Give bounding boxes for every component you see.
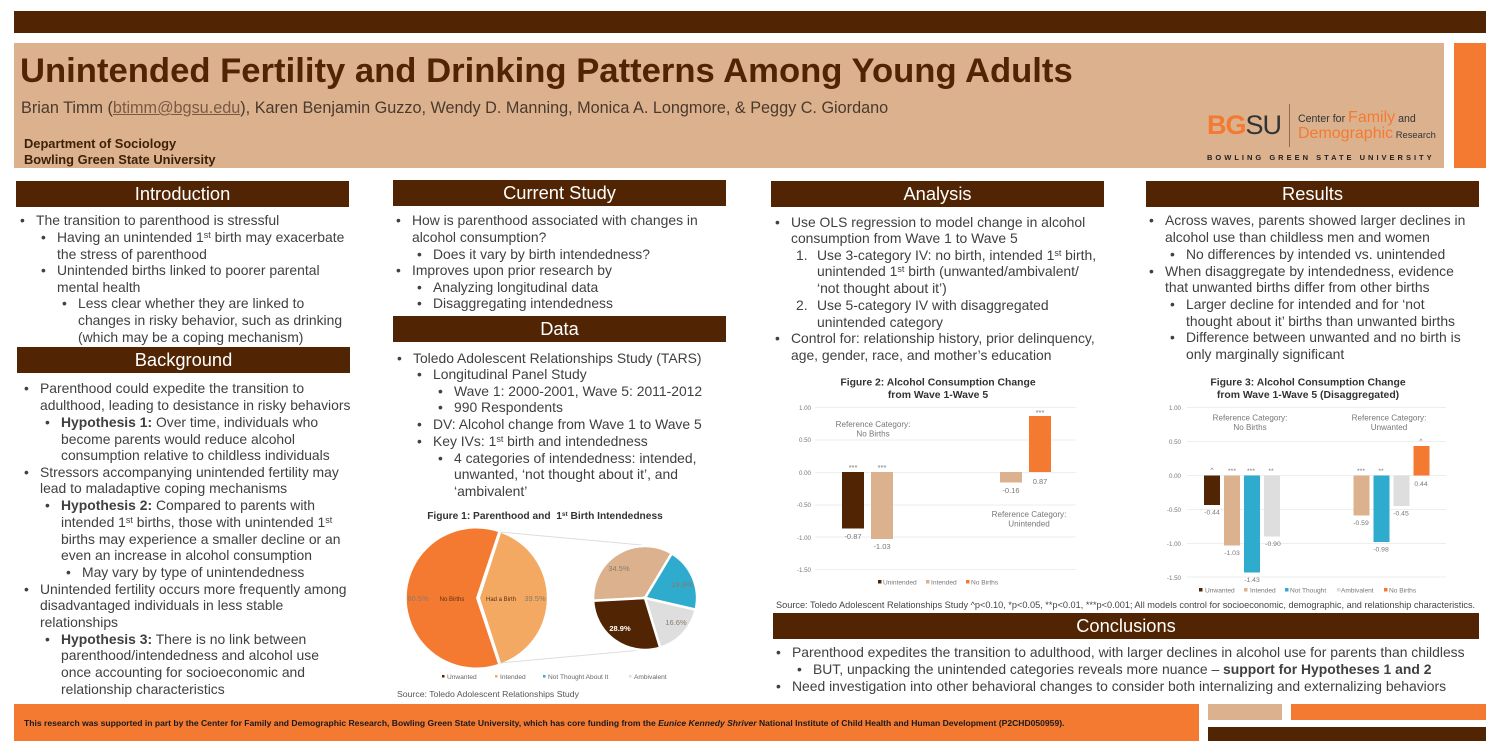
heading: current study: Current Study bbox=[503, 182, 616, 203]
chart: figure 2 alcohol consumption change: 0.00 bbox=[799, 470, 812, 477]
chart: figure 2 alcohol consumption change: Unintended bbox=[883, 580, 917, 586]
text: data bbox=[397, 350, 702, 499]
chart: figure 3 alcohol consumption change disaggregated: -0.45 bbox=[1393, 510, 1409, 518]
chart: figure 3 alcohol consumption change disaggregated: -0.50 bbox=[1167, 507, 1182, 514]
text: background: May vary by type of unintendedness bbox=[82, 564, 304, 580]
text: analysis bbox=[775, 214, 1096, 363]
text: current study: Analyzing longitudinal data bbox=[433, 279, 598, 295]
text: analysis: 1. bbox=[796, 247, 808, 263]
chart: figure 1 pie of pie bbox=[397, 511, 696, 699]
chart: figure 2 alcohol consumption change: No Births bbox=[856, 430, 890, 438]
heading: data bbox=[393, 316, 726, 342]
chart: figure 2 alcohol consumption change: Intended bbox=[931, 580, 957, 586]
text: data: • bbox=[438, 450, 443, 466]
text: results bbox=[1149, 212, 1465, 362]
chart: figure 2 alcohol consumption change: Reference Category: bbox=[836, 420, 910, 429]
text: analysis: • bbox=[775, 330, 780, 346]
text: analysis: Use 3-category IV: no birth, intended 1st birth, bbox=[817, 247, 1096, 263]
text: introduction: Unintended births linked to poorer parental bbox=[57, 262, 320, 278]
text: current study: Does it vary by birth intendedness? bbox=[433, 246, 650, 262]
text: introduction: (which may be a coping mechanism) bbox=[78, 329, 303, 345]
chart: figure 3 alcohol consumption change disaggregated: Ambivalent bbox=[1341, 588, 1374, 594]
chart: figure 3 alcohol consumption change disaggregated: Figure 3: Alcohol Consumption Change bbox=[1210, 378, 1406, 388]
chart: figure 3 alcohol consumption change disaggregated: -0.59 bbox=[1353, 520, 1369, 527]
chart: figure 2 alcohol consumption change: -1.00 bbox=[797, 535, 812, 542]
orange header block bbox=[1454, 43, 1486, 168]
text: background bbox=[24, 380, 350, 697]
chart: figure 3 alcohol consumption change disaggregated: No Births bbox=[1389, 588, 1417, 594]
chart: figure 3 alcohol consumption change disaggregated: -1.43 bbox=[1244, 577, 1260, 584]
chart: figure 3 alcohol consumption change disaggregated: No Births bbox=[1233, 423, 1267, 432]
text: current study: • bbox=[417, 279, 422, 295]
text: introduction: • bbox=[41, 262, 46, 278]
text: background: Parenthood could expedite the transition to bbox=[40, 380, 304, 396]
chart: figure 3 alcohol consumption change disaggregated: -0.98 bbox=[1373, 546, 1389, 554]
text: background: Hypothesis 3: There is no link between bbox=[61, 631, 306, 647]
chart: figure 3 alcohol consumption change disaggregated: ** bbox=[1268, 468, 1274, 475]
text: conclusions bbox=[776, 644, 1465, 694]
text: results: When disaggregate by intendedness, evidence bbox=[1165, 263, 1454, 279]
text: conclusions: • bbox=[776, 644, 781, 660]
text: background: Unintended fertility occurs more frequently among bbox=[40, 581, 347, 597]
text: analysis: unintended category bbox=[817, 314, 943, 330]
chart: figure 3 alcohol consumption change disaggregated: *** bbox=[1228, 468, 1236, 475]
chart: figure 2 alcohol consumption change: -0.87 bbox=[844, 532, 862, 541]
panel: introduction bbox=[16, 181, 349, 345]
chart: figure 3 alcohol consumption change disaggregated: ** bbox=[1378, 468, 1384, 475]
text: results: • bbox=[1170, 246, 1175, 262]
text: background: • bbox=[66, 564, 71, 580]
logo: BGSU center: Center for Family and bbox=[1298, 109, 1416, 126]
text: current study bbox=[396, 212, 698, 311]
chart: figure 1 pie of pie: 28.9% bbox=[609, 624, 631, 633]
text: background: intended 1st births, those with unintended 1st bbox=[61, 514, 332, 530]
chart: figure 2 alcohol consumption change: Unintended bbox=[1008, 520, 1050, 528]
top bar bbox=[14, 11, 1486, 33]
text: results: • bbox=[1170, 296, 1175, 312]
text: background: Hypothesis 1: Over time, individuals who bbox=[61, 414, 318, 430]
chart: figure 2 alcohol consumption change: *** bbox=[849, 463, 857, 472]
chart: figure 3 alcohol consumption change disaggregated: Reference Category: bbox=[1213, 414, 1287, 422]
text: data: ‘ambivalent’ bbox=[454, 483, 527, 499]
chart: figure 1 pie of pie: Birth Intendedness bbox=[568, 511, 663, 522]
text: background: Stressors accompanying unintended fertility may bbox=[40, 464, 339, 480]
text: background: relationships bbox=[40, 614, 118, 630]
text: background: even an increase in alcohol consumption bbox=[61, 547, 312, 563]
text: conclusions: BUT, unpacking the unintended categories reveals more nuance – support for Hypotheses 1 and 2 bbox=[813, 661, 1431, 677]
header banner bbox=[14, 43, 1444, 168]
chart: figure 2 alcohol consumption change: -0.16 bbox=[1002, 486, 1020, 495]
text: data: Wave 1: 2000-2001, Wave 5: 2011-2012 bbox=[454, 383, 702, 399]
text: introduction: • bbox=[41, 229, 46, 245]
chart: figure 1 pie of pie: 19.9% bbox=[671, 580, 693, 589]
chart: figure 2 alcohol consumption change: -1.03 bbox=[873, 542, 891, 551]
chart: figure 2 alcohol consumption change: from Wave 1-Wave 5 bbox=[888, 390, 988, 401]
text: introduction: • bbox=[20, 212, 25, 228]
chart: figure 2 alcohol consumption change: Reference Category: bbox=[992, 510, 1066, 519]
text: background: once accounting for socioeconomic and bbox=[61, 664, 305, 680]
chart: figure 1 pie of pie: Ambivalent bbox=[634, 674, 667, 681]
text: introduction: • bbox=[62, 295, 67, 311]
text: conclusions: • bbox=[797, 661, 802, 677]
chart: figure 2 alcohol consumption change: *** bbox=[878, 463, 886, 472]
text: results: No differences by intended vs. unintended bbox=[1186, 246, 1445, 262]
text: background: lead to maladaptive coping mechanisms bbox=[40, 480, 287, 496]
chart: figure 3 alcohol consumption change disaggregated: *** bbox=[1247, 468, 1255, 475]
text: current study: • bbox=[396, 262, 401, 278]
chart: figure 2 alcohol consumption change: -0.50 bbox=[797, 502, 812, 509]
chart: figure 3 alcohol consumption change disaggregated: ^ bbox=[1210, 467, 1214, 474]
text: introduction: Less clear whether they are linked to bbox=[78, 295, 304, 311]
chart: figure 3 alcohol consumption change disaggregated: -1.50 bbox=[1167, 575, 1182, 582]
footer accent: brown bbox=[1208, 727, 1486, 741]
text: data: 990 Respondents bbox=[454, 399, 563, 415]
chart: figure 3 alcohol consumption change disaggregated: -0.90 bbox=[1265, 541, 1281, 548]
chart: figure 2 alcohol consumption change: No Births bbox=[971, 580, 999, 586]
text: data: • bbox=[417, 416, 422, 432]
logo: BGSU center: Demographic Research bbox=[1298, 125, 1436, 142]
text: analysis: consumption from Wave 1 to Wave 5 bbox=[791, 230, 1018, 246]
text: conclusions: Parenthood expedites the transition to adulthood, with larger declines in alcohol use for parents than childless bbox=[792, 644, 1465, 660]
text: background: parenthood/intendedness and alcohol use bbox=[61, 647, 319, 663]
chart: figure 1 pie of pie: 60.5% bbox=[407, 594, 429, 603]
chart: figure 1 pie of pie: st bbox=[562, 511, 569, 518]
chart: figure 3 alcohol consumption change disaggregated: 0.44 bbox=[1414, 481, 1428, 488]
text: results: • bbox=[1170, 329, 1175, 345]
heading: background bbox=[17, 347, 350, 373]
text: results: • bbox=[1149, 212, 1154, 228]
chart: figure 1 pie of pie: Not Thought About It bbox=[548, 674, 609, 681]
text: data: • bbox=[397, 350, 402, 366]
text: results: Across waves, parents showed larger declines in bbox=[1165, 212, 1465, 228]
text: data: • bbox=[417, 433, 422, 449]
text: results: Difference between unwanted and no birth is bbox=[1186, 329, 1461, 345]
text: introduction: mental health bbox=[57, 279, 140, 295]
text: background: births may experience a smaller decline or an bbox=[61, 531, 340, 547]
text: introduction: The transition to parenthood is stressful bbox=[36, 212, 279, 228]
chart: figure 3 alcohol consumption change disaggregated bbox=[1167, 378, 1446, 594]
panel: results bbox=[1146, 181, 1479, 362]
chart: figure 3 alcohol consumption change disaggregated: from Wave 1-Wave 5 (Disaggregated) bbox=[1217, 390, 1399, 401]
panel: conclusions bbox=[773, 613, 1479, 694]
text: results: that unwanted births differ from other births bbox=[1165, 279, 1430, 295]
text: data: unwanted, ‘not thought about it’, and bbox=[454, 466, 678, 482]
panel: data bbox=[393, 316, 726, 499]
text: data: Longitudinal Panel Study bbox=[433, 366, 587, 382]
source note: Source: Toledo Adolescent Relationships Study ^p<0.10, *p<0.05, **p<0.01, ***p<0.001; All models control for socioeconomic, demographic, and relationship characteristics. bbox=[776, 600, 1475, 610]
chart: figure 3 alcohol consumption change disaggregated: -1.00 bbox=[1167, 541, 1182, 548]
heading: conclusions: Conclusions bbox=[1076, 615, 1176, 636]
text: introduction: Having an unintended 1st birth may exacerbate bbox=[57, 229, 344, 245]
text: data: • bbox=[438, 383, 443, 399]
text: conclusions: Need investigation into other behavioral changes to consider both internalizing and externalizing behaviors bbox=[792, 678, 1446, 694]
text: current study: • bbox=[396, 212, 401, 228]
heading: analysis: Analysis bbox=[903, 183, 972, 204]
department bbox=[24, 136, 216, 166]
chart: figure 3 alcohol consumption change disaggregated: 0.00 bbox=[1169, 473, 1182, 480]
department: Department of Sociology bbox=[24, 136, 176, 151]
text: background: • bbox=[24, 380, 29, 396]
footer: funding note bbox=[14, 704, 1199, 741]
chart: figure 2 alcohol consumption change: Figure 2: Alcohol Consumption Change bbox=[840, 378, 1036, 388]
logo: BGSU center bbox=[1207, 104, 1436, 162]
text: current study: Improves upon prior research by bbox=[412, 262, 612, 278]
funding text: This research was supported in part by the Center for Family and Demographic Research, Bowling Green State University, which has core funding from the Eunice Kennedy Shriver National Institute of Child Health and Human Development (P2CHD050959). bbox=[24, 718, 1064, 728]
text: analysis: 2. bbox=[796, 297, 808, 313]
text: background: • bbox=[45, 414, 50, 430]
text: current study: • bbox=[417, 295, 422, 311]
chart: figure 2 alcohol consumption change: 0.87 bbox=[1033, 477, 1047, 486]
heading: introduction bbox=[16, 181, 349, 207]
chart: figure 3 alcohol consumption change disaggregated: -0.44 bbox=[1204, 510, 1220, 516]
text: analysis: ‘not thought about it’) bbox=[817, 280, 947, 296]
text: analysis: Control for: relationship history, prior delinquency, bbox=[791, 330, 1095, 346]
text: analysis: unintended 1st birth (unwanted/ambivalent/ bbox=[817, 263, 1079, 279]
text: analysis: • bbox=[775, 214, 780, 230]
chart: figure 3 alcohol consumption change disaggregated: Reference Category: bbox=[1352, 414, 1426, 422]
title: Unintended Fertility and Drinking Patterns Among Young Adults bbox=[20, 52, 1073, 90]
text: data: Toledo Adolescent Relationships Study (TARS) bbox=[413, 350, 702, 366]
chart: figure 3 alcohol consumption change disaggregated: Unwanted bbox=[1205, 588, 1235, 594]
heading: background: Background bbox=[135, 349, 232, 370]
chart: figure 3 alcohol consumption change disaggregated: 0.50 bbox=[1169, 439, 1182, 446]
panel: analysis bbox=[771, 181, 1104, 363]
chart: figure 1 pie of pie: 16.6% bbox=[665, 618, 687, 627]
chart: figure 1 pie of pie: Unwanted bbox=[447, 674, 477, 681]
text: background: • bbox=[24, 464, 29, 480]
panel: current study bbox=[393, 180, 726, 311]
chart: figure 2 alcohol consumption change: 1.00 bbox=[799, 405, 812, 412]
chart: figure 1 pie of pie: Intended bbox=[500, 674, 526, 681]
text: background: Hypothesis 2: Compared to parents with bbox=[61, 497, 315, 513]
text: introduction bbox=[20, 212, 344, 345]
heading: current study bbox=[393, 180, 726, 206]
text: background: consumption relative to childless individuals bbox=[61, 447, 330, 463]
text: current study: alcohol consumption? bbox=[412, 229, 546, 245]
heading: results: Results bbox=[1282, 183, 1343, 204]
heading: introduction: Introduction bbox=[135, 183, 230, 204]
text: data: DV: Alcohol change from Wave 1 to Wave 5 bbox=[433, 416, 702, 432]
text: results: Larger decline for intended and for ‘not bbox=[1186, 296, 1425, 312]
text: current study: Disaggregating intendedness bbox=[433, 295, 613, 311]
heading: analysis bbox=[771, 181, 1104, 207]
text: results: only marginally significant bbox=[1186, 346, 1344, 362]
text: background: • bbox=[24, 581, 29, 597]
authors: Brian Timm (btimm@bgsu.edu), Karen Benjamin Guzzo, Wendy D. Manning, Monica A. Longmore, & Peggy C. Giordano bbox=[21, 99, 888, 117]
text: results: • bbox=[1149, 263, 1154, 279]
chart: figure 2 alcohol consumption change: 0.50 bbox=[799, 437, 812, 444]
text: analysis: Use 5-category IV with disaggregated bbox=[817, 297, 1049, 313]
chart: figure 3 alcohol consumption change disaggregated: Not Thought bbox=[1290, 588, 1326, 594]
chart: figure 3 alcohol consumption change disaggregated: Intended bbox=[1250, 588, 1276, 594]
text: results: thought about it’ births than unwanted births bbox=[1186, 313, 1455, 329]
text: introduction: the stress of parenthood bbox=[57, 246, 207, 262]
text: introduction: changes in risky behavior, such as drinking bbox=[78, 312, 342, 328]
footer accent: tan bbox=[1208, 704, 1282, 720]
chart: figure 1 pie of pie: Source: Toledo Adolescent Relationships Study bbox=[397, 689, 580, 699]
heading: results bbox=[1146, 181, 1479, 207]
panel: background bbox=[17, 347, 350, 697]
chart: figure 3 alcohol consumption change disaggregated: -1.03 bbox=[1224, 550, 1240, 557]
chart: figure 3 alcohol consumption change disaggregated: *** bbox=[1357, 468, 1365, 475]
text: conclusions: • bbox=[776, 678, 781, 694]
text: background: disadvantaged individuals in less stable bbox=[40, 597, 283, 613]
logo: BGSU center: BOWLING GREEN STATE UNIVERSITY bbox=[1207, 153, 1435, 162]
text: analysis: age, gender, race, and mother’s education bbox=[791, 347, 1052, 363]
text: data: • bbox=[417, 366, 422, 382]
chart: figure 1 pie of pie: Had a Birth bbox=[486, 597, 516, 603]
text: background: • bbox=[45, 631, 50, 647]
chart: figure 3 alcohol consumption change disaggregated: ^ bbox=[1419, 438, 1423, 445]
text: current study: How is parenthood associated with changes in bbox=[412, 212, 698, 228]
chart: figure 2 alcohol consumption change: -1.50 bbox=[797, 567, 812, 574]
chart: figure 2 alcohol consumption change bbox=[797, 378, 1076, 586]
text: background: relationship characteristics bbox=[61, 681, 225, 697]
text: current study: • bbox=[417, 246, 422, 262]
chart: figure 3 alcohol consumption change disaggregated: 1.00 bbox=[1169, 405, 1182, 412]
chart: figure 2 alcohol consumption change: *** bbox=[1036, 408, 1044, 417]
chart: figure 1 pie of pie: 34.5% bbox=[608, 564, 630, 573]
text: data: • bbox=[438, 399, 443, 415]
text: data: Key IVs: 1st birth and intendedness bbox=[433, 433, 648, 449]
text: results: alcohol use than childless men and women bbox=[1165, 229, 1430, 245]
text: background: become parents would reduce alcohol bbox=[61, 431, 295, 447]
department: Bowling Green State University bbox=[24, 152, 216, 166]
text: background: adulthood, leading to desistance in risky behaviors bbox=[40, 397, 350, 413]
chart: figure 1 pie of pie: Figure 1: Parenthood and 1 bbox=[427, 511, 562, 522]
text: data: 4 categories of intendedness: intended, bbox=[454, 450, 696, 466]
text: analysis: Use OLS regression to model change in alcohol bbox=[791, 214, 1085, 230]
heading: conclusions bbox=[773, 613, 1479, 639]
heading: data: Data bbox=[540, 318, 579, 339]
chart: figure 1 pie of pie: 39.5% bbox=[524, 594, 546, 603]
footer accent: orange bbox=[1291, 704, 1486, 720]
text: background: • bbox=[45, 497, 50, 513]
chart: figure 3 alcohol consumption change disaggregated: Unwanted bbox=[1371, 423, 1407, 432]
logo: BGSU center: BGSU bbox=[1207, 110, 1281, 140]
chart: figure 1 pie of pie: No Births bbox=[440, 597, 464, 603]
